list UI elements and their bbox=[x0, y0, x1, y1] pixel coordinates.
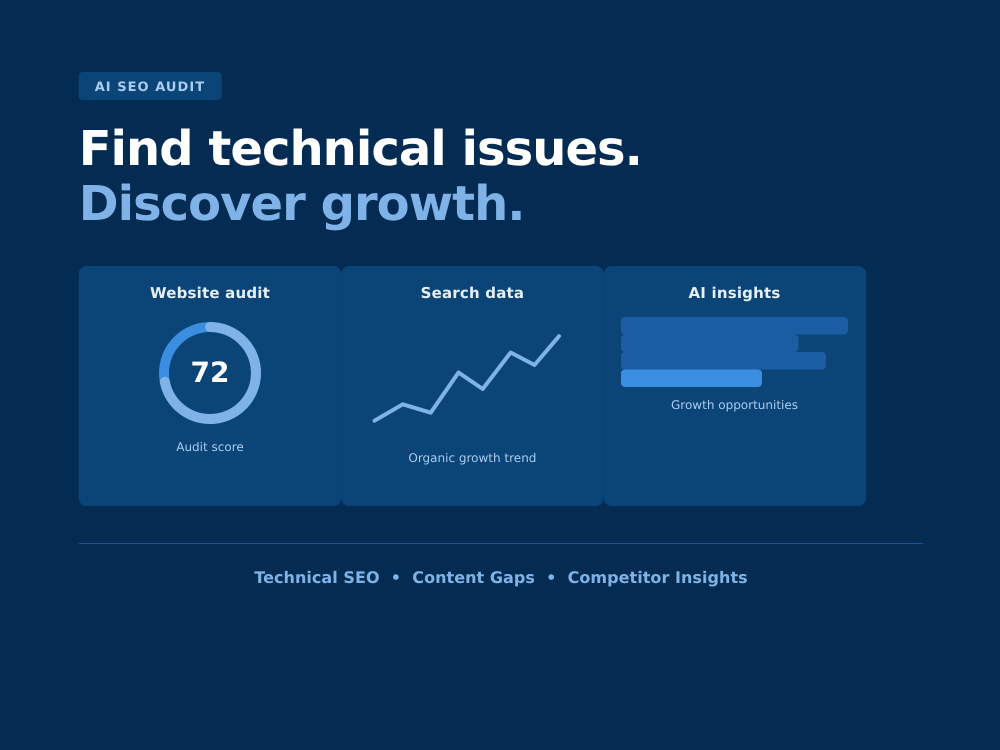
badge: AI SEO Audit bbox=[79, 72, 222, 100]
title bbox=[79, 121, 642, 232]
score value: 72 bbox=[191, 356, 229, 389]
heading: website audit: Website audit bbox=[150, 284, 270, 302]
caption: organic growth trend: Organic growth trend bbox=[408, 451, 536, 465]
title: Find technical issues. bbox=[79, 121, 642, 177]
panel: search data bbox=[341, 266, 604, 506]
title: Discover growth. bbox=[79, 176, 525, 232]
bars: growth opportunities bbox=[621, 317, 848, 387]
heading: AI insights: AI insights bbox=[688, 284, 781, 302]
caption: growth opportunities: Growth opportunities bbox=[671, 398, 798, 412]
donut chart: audit score 72 bbox=[164, 327, 256, 419]
line chart: organic growth bbox=[374, 336, 559, 421]
panel: AI insights bbox=[604, 266, 866, 506]
caption: audit score: Audit score bbox=[176, 440, 244, 454]
badge: AI SEO Audit: AI SEO AUDIT bbox=[95, 80, 205, 95]
heading: search data: Search data bbox=[421, 284, 524, 302]
panel: website audit bbox=[79, 266, 341, 506]
footer: topics: Technical SEO • Content Gaps • Competitor Insights bbox=[254, 568, 748, 587]
